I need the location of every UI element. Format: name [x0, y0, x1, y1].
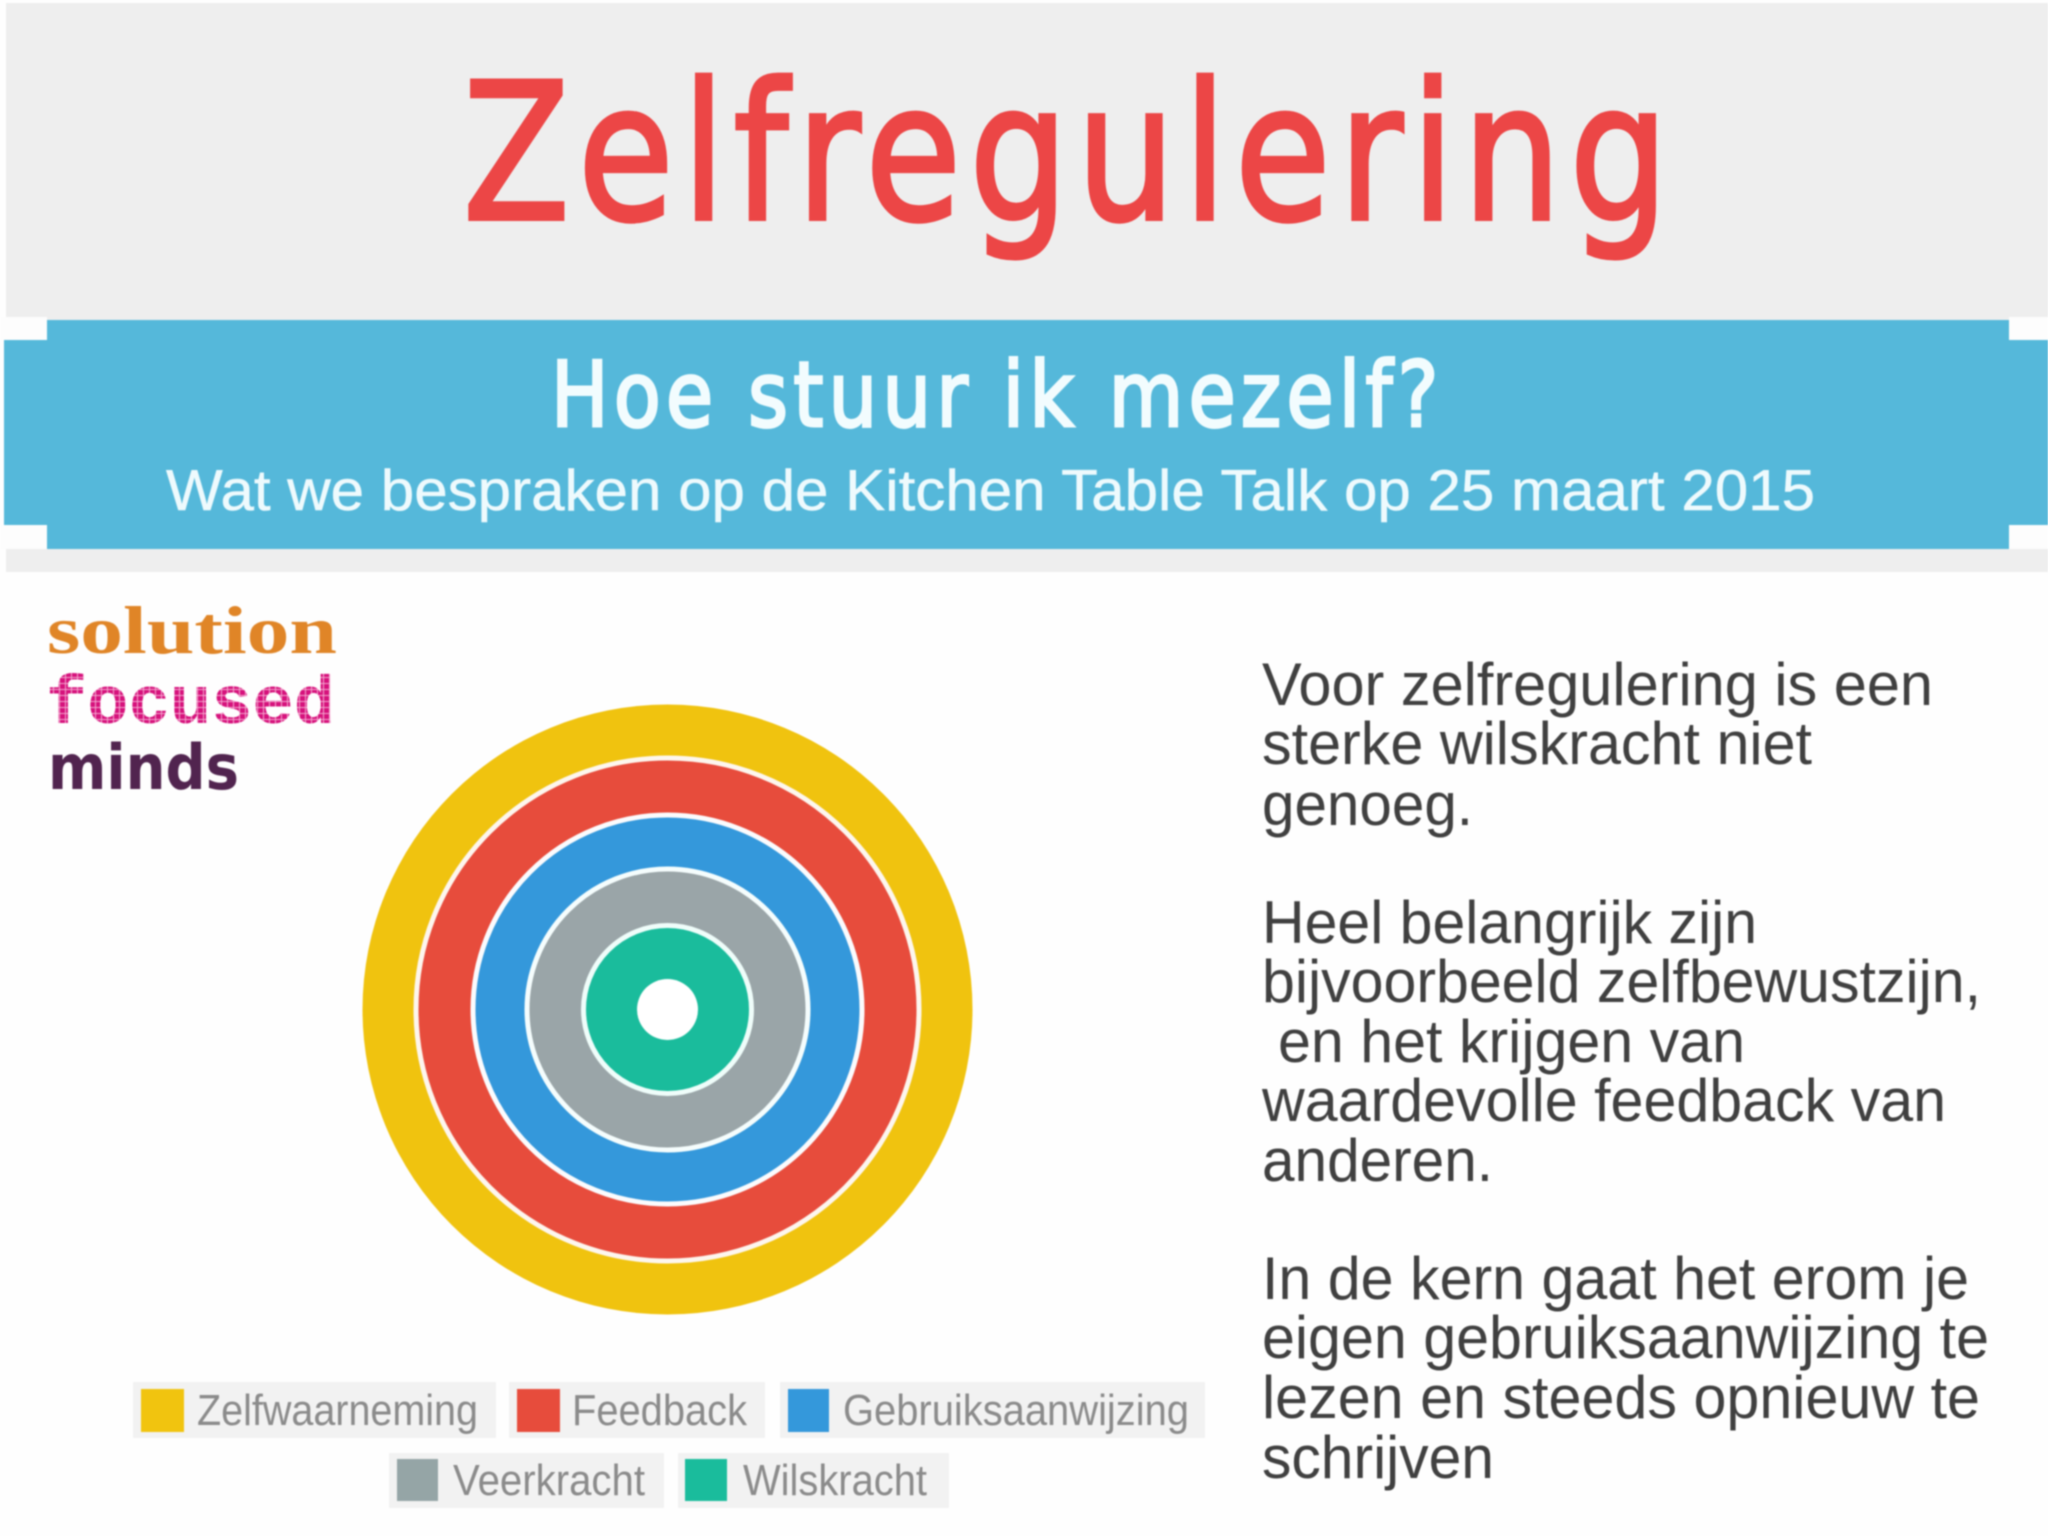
- legend item: Wilskracht: Wilskracht: [743, 1457, 927, 1505]
- legend item: Feedback: [509, 1382, 765, 1438]
- paragraph: the core: schrijven: [1262, 1424, 1494, 1491]
- paragraph: self-awareness and feedback: Heel belangrijk zijn: [1262, 889, 1757, 956]
- subtitle detail line: Wat we bespraken op de Kitchen Table Talk op 25 maart 2015: [166, 459, 1815, 523]
- legend item: Zelfwaarneming: Zelfwaarneming: [197, 1387, 478, 1435]
- logo word: solution: solution: [47, 592, 337, 668]
- legend item: Gebruiksaanwijzing: Gebruiksaanwijzing: [843, 1387, 1189, 1435]
- legend: [133, 1382, 1205, 1508]
- paragraph: self-awareness and feedback: en het krijgen van: [1278, 1008, 1745, 1075]
- legend item: Feedback: Feedback: [572, 1387, 747, 1435]
- logo: solution focused minds: [46, 592, 337, 804]
- paragraph: the core: lezen en steeds opnieuw te: [1262, 1364, 1980, 1431]
- legend item: Veerkracht: [389, 1453, 664, 1508]
- paragraph: the core: eigen gebruiksaanwijzing te: [1262, 1304, 1989, 1371]
- legend item: Veerkracht: Veerkracht: [453, 1457, 645, 1505]
- ring: Gebruiksaanwijzing: [473, 815, 862, 1204]
- ring: Veerkracht: [527, 869, 808, 1150]
- paragraph: self-awareness and feedback: waardevolle feedback van: [1261, 1067, 1946, 1134]
- blue banner: [4, 320, 2048, 549]
- legend item: Zelfwaarneming: [133, 1382, 496, 1438]
- ring: Zelfwaarneming: [362, 704, 972, 1314]
- centre hole: [637, 979, 698, 1040]
- paragraph: self-awareness and feedback: bijvoorbeeld zelfbewustzijn,: [1262, 948, 1981, 1015]
- paragraph: willpower is not enough: genoeg.: [1262, 771, 1473, 838]
- ring: Wilskracht: [584, 926, 752, 1094]
- chart: concentric rings: [362, 704, 972, 1314]
- text block: body copy: [1261, 651, 1989, 1491]
- logo word: focused: focused: [46, 667, 335, 744]
- paragraph: the core: In de kern gaat het erom je: [1262, 1245, 1969, 1312]
- blue banner corners cut: [0, 317, 2048, 549]
- ring: Feedback: [416, 758, 919, 1261]
- paragraph: willpower is not enough: [1262, 651, 1933, 838]
- paragraph: self-awareness and feedback: anderen.: [1262, 1127, 1493, 1194]
- paragraph: willpower is not enough: sterke wilskracht niet: [1262, 710, 1812, 777]
- header grey background: [6, 3, 2048, 572]
- title: Zelfregulering: [463, 43, 1668, 264]
- paragraph: the core: [1262, 1245, 1989, 1491]
- legend item: Wilskracht: [678, 1453, 949, 1508]
- panel: header: [0, 3, 2048, 572]
- subtitle: Hoe stuur ik mezelf?: [551, 342, 1438, 448]
- paragraph: willpower is not enough: Voor zelfregulering is een: [1262, 651, 1933, 718]
- paragraph: self-awareness and feedback: [1261, 889, 1981, 1194]
- logo word: minds: minds: [48, 731, 239, 804]
